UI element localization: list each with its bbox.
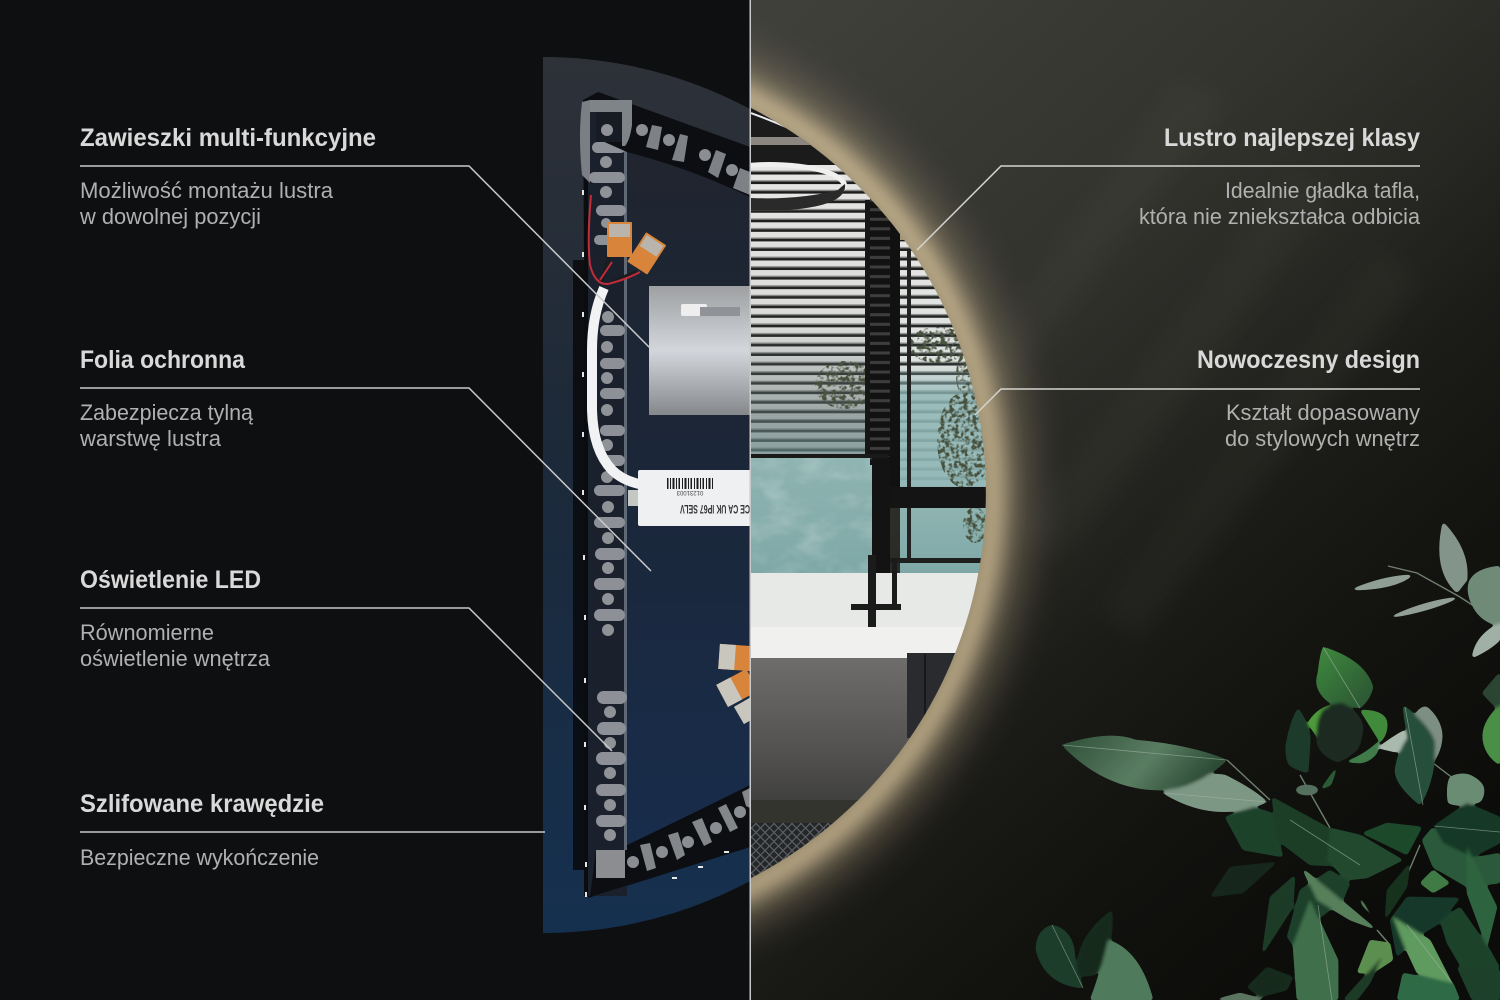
lower-left leaves [1036,910,1153,1000]
blinds left section [751,165,871,457]
leader line [80,166,650,348]
protective foil inner panel [627,152,750,845]
long pointed leaves [1062,736,1422,1000]
faucet [851,555,901,627]
heading: Folia ochronna [80,346,246,374]
patterned rug [751,823,833,878]
leader line [975,389,1420,415]
shadow band beside strip [573,260,585,870]
heading: Nowoczesny design [1197,346,1420,374]
all leaves [1036,522,1500,1000]
leader line [80,608,612,751]
leaf veins [1052,647,1500,1000]
power supply label: 01231003 [676,489,703,495]
callout: Nowoczesny design [975,346,1420,451]
windowsill bright area [751,573,991,627]
upper-right leaves [1350,522,1500,765]
callout: Folia ochronna [79,346,651,571]
leader line [80,388,651,571]
diagonal light streaks [990,80,1420,640]
central round leaves [1286,647,1484,805]
lower orange connectors [716,644,750,724]
plant: eucalyptus branch [1036,522,1500,1000]
power supply label: CE CA UK IP67 SELV [680,502,750,516]
dark upper ceiling [751,108,841,170]
description: Kształt dopasowany [1226,400,1420,425]
panel: right lit wall background [751,0,1500,1000]
orange connector two [627,232,666,275]
trees seen through blinds [815,327,986,543]
orange connector one [607,222,632,257]
window lake view [751,457,872,573]
description: Możliwość montażu lustra [80,178,334,203]
leader line [917,166,1420,250]
blinds right section [900,240,990,573]
heading: Oświetlenie LED [80,566,261,594]
stems [1227,566,1500,945]
panel: mirror reflection [751,108,986,878]
description: Równomierne [80,620,214,645]
callout: Szlifowane krawędzie [80,790,545,870]
bathtub rim [751,627,971,658]
LED strip left side [580,100,627,897]
heading: Lustro najlepszej klasy [1164,124,1420,152]
leader line [80,831,545,833]
heading: Szlifowane krawędzie [80,790,324,818]
window frame columns [751,198,986,573]
floor [751,800,858,824]
panel: back of the mirror [543,57,750,933]
white cable [592,288,639,484]
right cluster leaves [1213,803,1500,1000]
ceiling stripe [751,137,810,145]
description: Bezpieczne wykończenie [80,845,319,870]
warm LED glow [751,40,1049,950]
mirror back plate [543,57,750,933]
description: Zabezpiecza tylną [80,400,254,425]
description: oświetlenie wnętrza [80,646,271,671]
description: która nie zniekształca odbicia [1139,204,1421,229]
description: w dowolnej pozycji [79,204,261,229]
bathtub body [751,658,911,801]
left dark background [0,0,750,1000]
towels [907,653,957,738]
ceiling lamp ring [751,112,847,210]
callout: Oświetlenie LED [80,566,612,751]
callout: Lustro najlepszej klasy [917,124,1421,250]
description: warstwę lustra [79,426,222,451]
callout: Zawieszki multi-funkcyjne [79,124,650,348]
description: do stylowych wnętrz [1225,426,1420,451]
description: Idealnie gładka tafla, [1225,178,1420,203]
LED strip bottom arc [590,785,750,897]
black gap beside strip [583,92,750,898]
LED strip top arc [590,92,750,197]
centre divider line [750,0,751,1000]
connector wires [589,195,640,284]
heading: Zawieszki multi-funkcyjne [80,124,376,152]
power supply label [628,470,752,526]
mounting hanger plate [649,286,750,415]
